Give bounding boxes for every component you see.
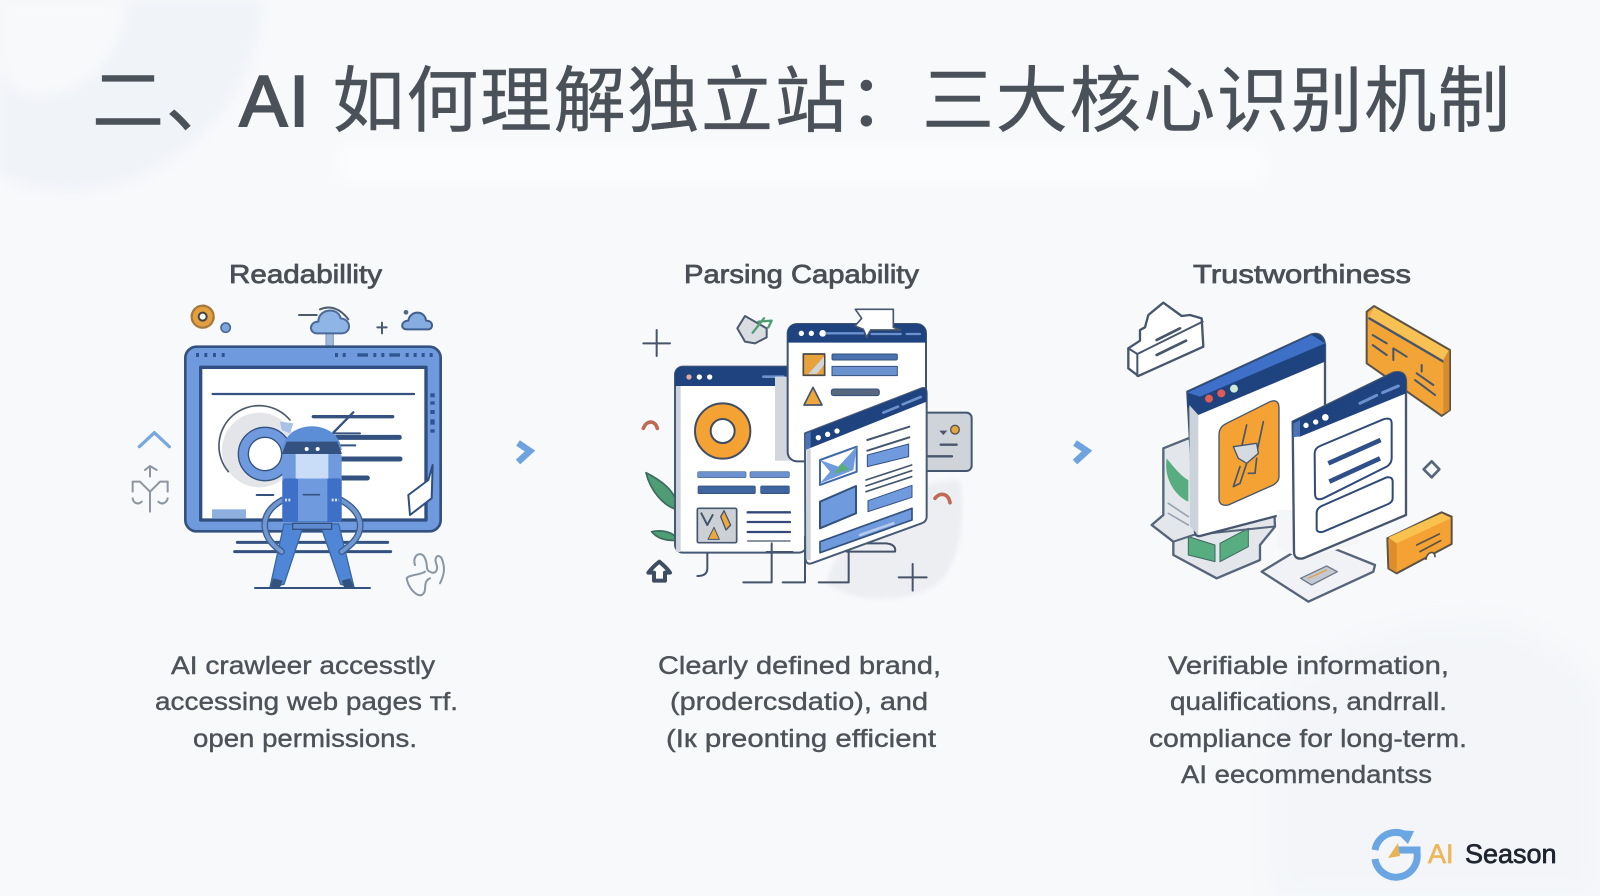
illustration: parsing capability windows (643, 309, 972, 599)
card: right gray (913, 413, 972, 471)
text lines (313, 412, 400, 478)
logo text: Season (1465, 839, 1557, 869)
shadow blob (827, 480, 962, 599)
icon: branch (133, 466, 168, 512)
heading: Parsing Capability: Parsing Capability (684, 259, 919, 289)
icon: arrow glyph (648, 562, 670, 581)
description: readability (155, 652, 458, 753)
description: readability: accessing web pages тf. (155, 688, 458, 716)
heading: Trustworthiness: Trustworthiness (1193, 259, 1411, 289)
icon: arc (643, 422, 657, 428)
heading: Readability: Readabillity (229, 259, 382, 289)
leaves (646, 473, 678, 540)
connectors (697, 537, 895, 582)
arrow: chevron 2 (1075, 443, 1087, 462)
description: parsing capability: (prodercsdatio), and (670, 688, 928, 716)
monitor stand lines (235, 542, 391, 552)
window: front tilted (805, 388, 927, 564)
window: back right (775, 309, 926, 461)
description: parsing capability: Clearly defined brand, (658, 652, 941, 680)
icon: isometric cloud (1128, 303, 1203, 376)
icon: squiggle (407, 554, 444, 595)
card: orange small (1387, 512, 1452, 573)
window: isometric browser right (1293, 372, 1406, 559)
illustration: readability robot and monitor (133, 306, 444, 595)
logo text: AI (1428, 839, 1454, 869)
description: trustworthiness: qualifications, andrrall. (1170, 688, 1447, 716)
icon: cloud on stem (299, 307, 349, 347)
server base (1152, 438, 1275, 578)
logo mark (1375, 830, 1417, 877)
icon: plus (899, 564, 927, 591)
icon: chevron up (139, 433, 169, 447)
description: trustworthiness: compliance for long-term. (1149, 725, 1467, 753)
illustration: trustworthiness isometric screens (1128, 303, 1452, 602)
description: readability: open permissions. (193, 725, 417, 753)
icon: gear (192, 306, 230, 332)
page curl (408, 465, 433, 515)
description: trustworthiness: Verifiable information, (1168, 652, 1449, 680)
icon: diamond (1424, 461, 1439, 477)
icon: plus (643, 330, 670, 356)
description: trustworthiness: AI eecommendantss (1181, 761, 1432, 789)
donut chart (219, 406, 297, 495)
icon: arc right (935, 494, 950, 503)
robot (255, 426, 370, 588)
arrow: chevron 1 (518, 443, 530, 462)
icon: cube (737, 316, 772, 343)
window: isometric browser left (1187, 334, 1325, 536)
description: parsing capability (658, 652, 941, 753)
monitor (185, 347, 441, 531)
description: parsing capability: (Iк preonting efficient (666, 725, 936, 753)
logo: AI Season (1375, 830, 1557, 877)
title: 二、AI 如何理解独立站：三大核心识别机制 (92, 62, 1510, 142)
speech bubble (855, 309, 901, 337)
icon: plus and cloud (377, 310, 432, 333)
window: left (675, 367, 807, 553)
description: readability: AI crawleer accesstly (171, 652, 436, 680)
card: orange isometric (1367, 306, 1450, 416)
monitor stand (1262, 510, 1375, 602)
description: trustworthiness (1149, 652, 1467, 789)
